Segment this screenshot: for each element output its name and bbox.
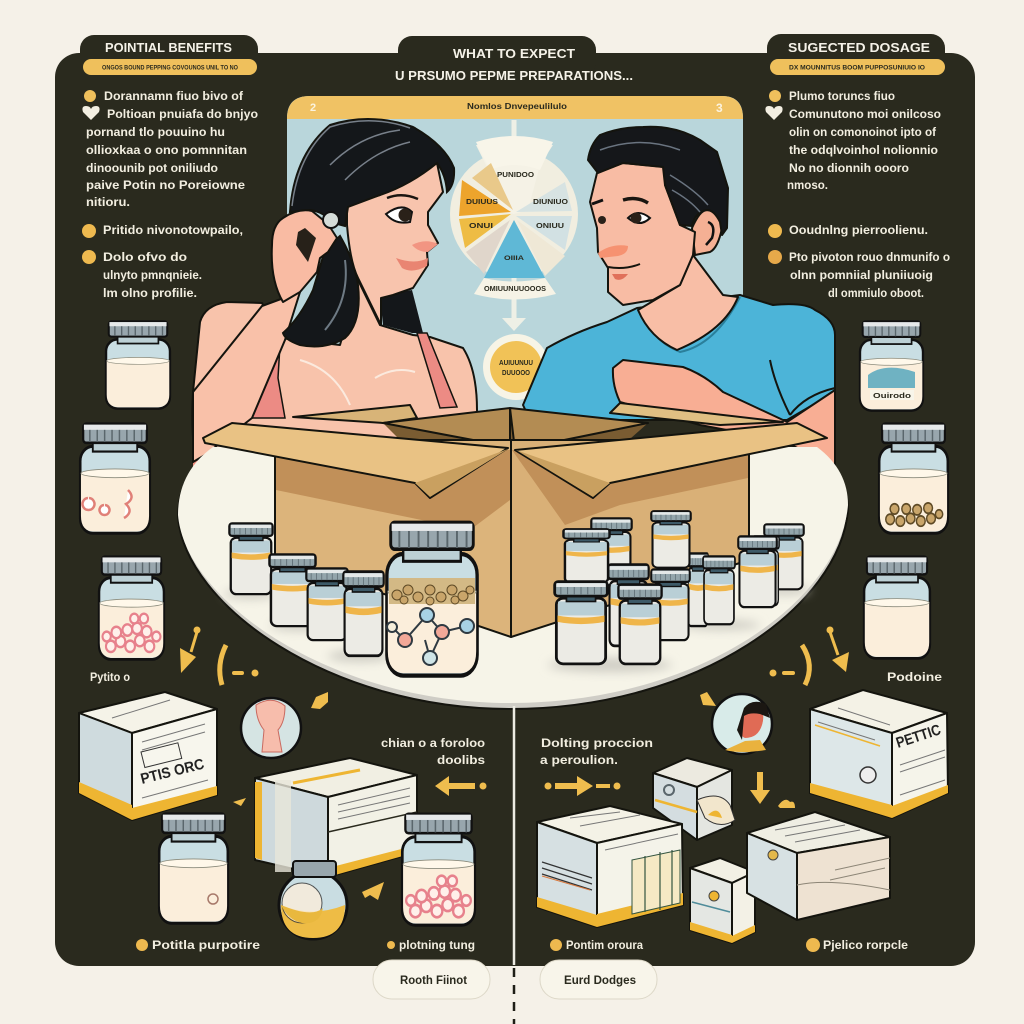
text block: right dosage: olnn pomniial pluniiuoig [790,270,933,282]
arrow: left process [435,776,486,796]
man: face [590,163,695,305]
process captions: doolibs [437,755,485,767]
text block: left benefits: lm olno profilie. [103,288,197,300]
text block: right dosage: Comunutono moi onilcoso [789,109,941,121]
box: right flap [515,423,827,498]
pie wheel: OIIIA [504,255,524,262]
box: narrow carton [690,858,755,943]
woman: arm [193,292,300,462]
heading: left tab [83,40,257,75]
panel: centre chart board: 2 [310,102,316,114]
text block: left benefits: Dorannamn fiuo bivo of [104,91,243,103]
jar captions [90,672,942,684]
right column jars: Ouirodo [873,393,911,400]
man: hair [588,127,728,235]
box: top right carton [810,690,948,818]
box: top left carton [79,692,217,820]
text block: left benefits: ulnyto pmnqnieie. [103,270,202,282]
panel: centre chart board: 3 [716,101,723,115]
woman: neck and face [347,163,443,325]
heading: centre title [395,46,633,83]
pie wheel: DIUNIUO [533,199,569,206]
heading: left tab: POINTIAL BENEFITS [105,40,232,55]
woman: long hair behind [283,236,359,346]
box: back right flap [610,403,783,425]
text block: right dosage: No no dionnih oooro [789,163,909,175]
box: table carton [537,806,683,927]
box: top right carton: PETTIC [894,721,943,752]
text block: right dosage: Plumo toruncs fiuo [789,91,895,103]
process captions [381,738,653,767]
box: back panel [383,408,648,450]
box: back left flap [293,405,417,423]
process captions: a peroulion. [540,755,618,767]
heading: left tab: ONGOS BOUND PEPPING COVOUNOS UNIL TO NO [102,64,238,72]
process captions: Dolting proccion [541,738,653,750]
icon: man portrait [712,694,772,754]
pie wheel: ONUI [469,223,493,230]
text block: left benefits [82,90,258,300]
box: top left carton: PTIS ORC [139,756,206,788]
text block: right dosage: nmoso. [787,180,828,192]
panel: centre chart board: Nomlos Dnvepeulilulo [467,101,567,111]
button: right [540,960,657,999]
button: left [373,960,490,999]
text block: right dosage: olin on comonoinot ipto of [789,127,936,139]
molecule [387,608,474,665]
box: left face [275,440,511,637]
woman: nose and mouth [412,241,438,252]
box: small carton with cap [653,758,735,840]
beads band [389,578,475,605]
text block: left benefits: Dolo ofvo do [103,252,187,264]
box: middle left carton [255,758,417,877]
left column jars [80,321,170,659]
heading: right tab: DX MOUNNITUS BOOM PUPPOSUNIUIO IO [789,64,925,72]
result badge [483,334,549,400]
heading: centre title: WHAT TO EXPECT [453,46,575,61]
button: left: Rooth Fiinot [400,975,467,987]
man: ear [692,210,722,255]
box: right face [511,440,749,637]
large jar with molecule [387,522,477,676]
man: nose and mouth [598,245,628,258]
bottom labels: plotning tung [399,940,475,952]
pie wheel: OMIUUNUUOOOS [484,286,546,293]
process captions: chian o a foroloo [381,738,485,750]
heading: right tab [770,40,945,75]
table jar shadows [224,585,810,672]
result badge: AUIUUNUU [499,360,533,367]
text block: left benefits: nitioru. [86,197,130,209]
pie wheel: DUIUUS [466,199,498,206]
jar captions: Podoine [887,672,942,684]
bottom labels: Potitla purpotire [152,940,260,952]
text block: left benefits: ollioxkaa o ono pomnnitan [86,145,247,157]
panel: centre chart board [287,96,743,420]
text block: left benefits: Poltioan pnuiafa do bnjyo [107,109,258,121]
arrow: right process [544,776,620,796]
bottom labels: Pjelico rorpcle [823,940,908,952]
man: arm and hand [613,360,835,465]
box: interior [383,408,648,470]
man figure [523,127,835,465]
bottom labels: Pontim oroura [566,940,644,952]
man: eyes and brows [628,213,650,223]
text block: left benefits: Pritido nivonotowpailo, [103,225,243,237]
button: right: Eurd Dodges [564,975,636,987]
box: left flap [203,423,508,498]
jar: bottom round yellow [279,861,347,939]
text block: right dosage: the odqlvoinhol nolionnio [789,145,938,157]
heading: centre title: U PRSUMO PEPME PREPARATIONS... [395,68,633,83]
woman: hand with earring [272,210,337,302]
text block: right dosage: dl ommiulo oboot. [828,288,924,300]
centre divider [513,706,515,1024]
man: ear detail [706,222,713,245]
text block: right dosage: Pto pivoton rouo dnmunifo o [789,252,950,264]
table plate [178,447,848,709]
box: textured carton [747,812,890,920]
woman figure [192,119,480,470]
man: neck [638,255,738,350]
jars on the table [224,511,810,672]
yellow arrows [180,626,849,900]
text block: left benefits: pornand tlo pouuino hu [86,127,225,139]
icon: woman portrait [241,698,301,758]
pie wheel [450,136,578,300]
woman: eye and brow [386,207,412,223]
result badge: DUUOOO [502,370,530,377]
text block: right dosage: Ooudnlng pierroolienu. [789,225,928,237]
woman: straps [250,345,285,418]
jar captions: Pytito o [90,672,130,684]
heading: right tab: SUGECTED DOSAGE [788,40,930,55]
text block: left benefits: paive Potin no Poreiowne [86,180,245,192]
man: shirt [523,295,835,420]
woman: torso [192,280,480,470]
text block: left benefits: dinoounib pot oniliudo [86,163,218,175]
pie wheel: ONIUU [536,223,564,230]
jar: bottom left cream [159,814,228,923]
woman: hair top [290,119,454,226]
right column jars [860,321,948,658]
jar: bottom right pink [402,814,475,925]
cardboard box [203,403,827,637]
bottom labels [136,938,908,952]
text block: right dosage [765,90,950,300]
pie wheel: PUNIDOO [497,172,535,179]
